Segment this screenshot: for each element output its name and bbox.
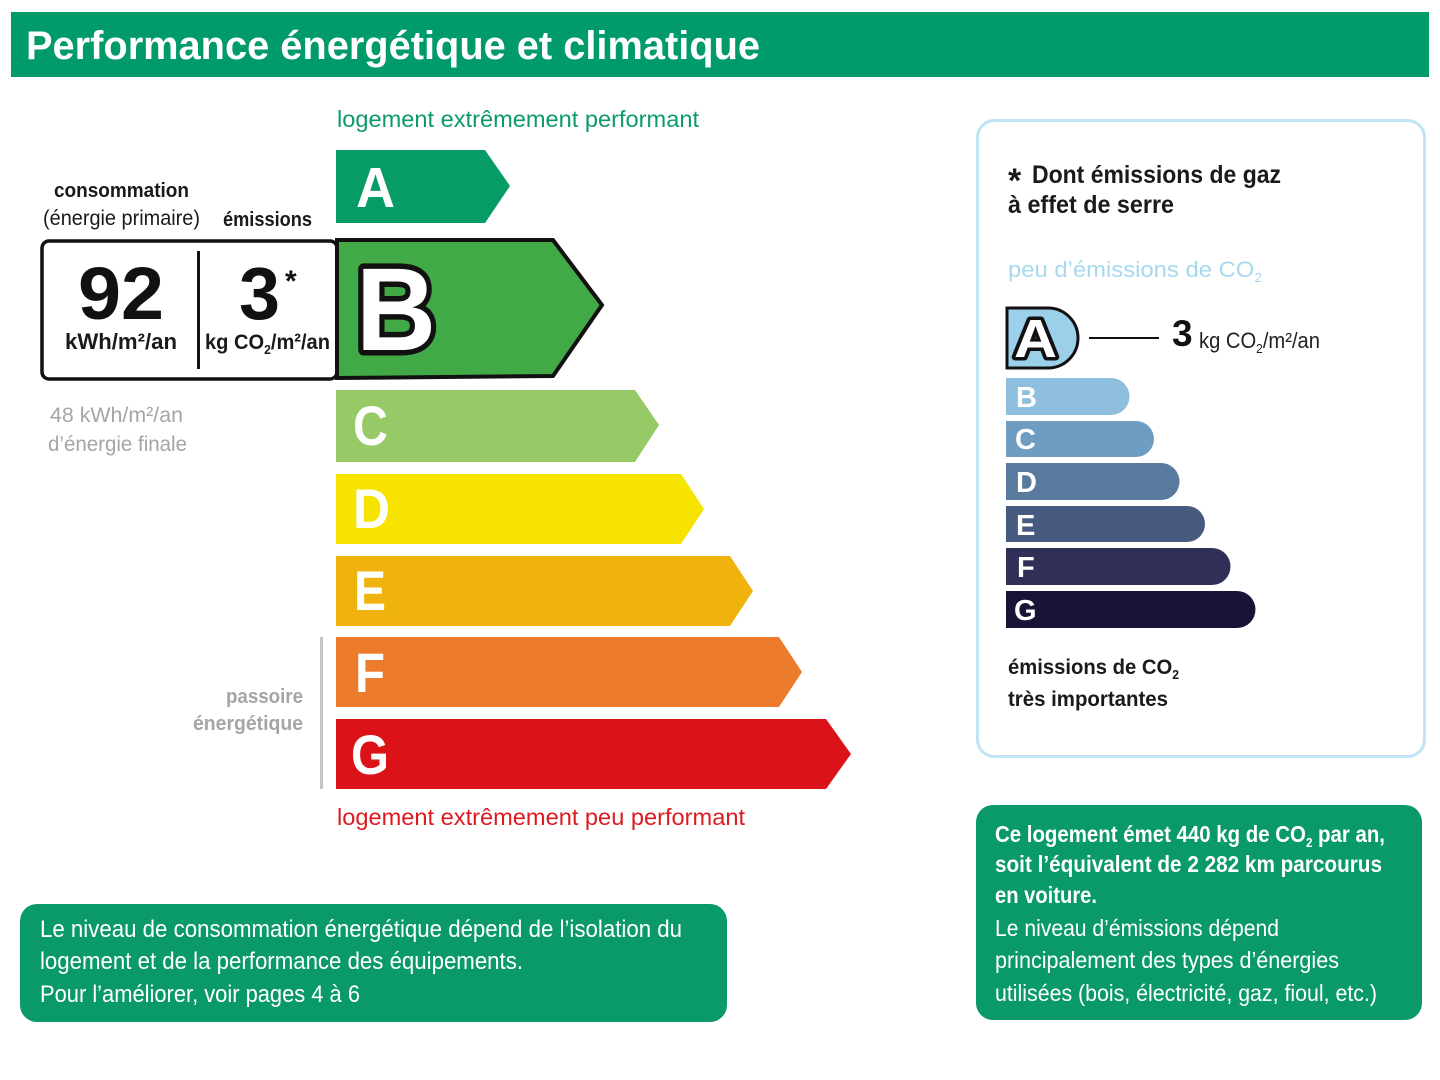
emissions value: 2	[1256, 341, 1263, 356]
bar E: E	[1016, 510, 1035, 542]
current rating box with values	[42, 241, 337, 379]
arrow E	[336, 556, 753, 626]
energy scale arrows	[336, 150, 851, 789]
high emissions label	[1008, 655, 1179, 711]
arrow F	[336, 637, 802, 707]
callout: energy consumption: Pour l’améliorer, voir pages 4 à 6	[40, 981, 360, 1008]
callout: energy consumption	[20, 904, 727, 1022]
callout: energy consumption: logement et de la performance des équipements.	[40, 948, 523, 975]
consumption column heading: (énergie primaire)	[43, 207, 200, 230]
callout: CO2 emissions: Le niveau d’émissions dépend	[995, 915, 1279, 941]
passoire énergétique label with bracket	[193, 637, 322, 789]
climate scale bars	[1006, 378, 1255, 628]
callout: CO2 emissions: par an,	[1312, 821, 1385, 847]
emissions value: 3	[1172, 313, 1193, 354]
high emissions label: très importantes	[1008, 687, 1168, 711]
emissions value: /m²/an	[1263, 328, 1320, 353]
emissions column heading: émissions	[223, 209, 312, 231]
bar G: G	[1014, 595, 1037, 627]
panel heading	[1008, 161, 1281, 219]
final energy note: 48 kWh/m²/an	[50, 403, 183, 427]
arrow E: E	[354, 559, 386, 622]
bar B	[1006, 378, 1130, 415]
arrow C: C	[353, 394, 388, 457]
unit: kWh: kWh/m²/an	[65, 329, 177, 354]
top scale label: logement extrêmement performant	[337, 106, 700, 132]
bar C	[1006, 421, 1154, 457]
callout: CO2 emissions: 2	[1306, 835, 1312, 850]
arrow C	[336, 390, 659, 462]
arrow D: D	[353, 477, 390, 540]
value: 92: 92	[78, 252, 164, 335]
arrow A: A	[356, 156, 395, 220]
final energy note	[48, 403, 187, 456]
value: 3: 3	[239, 252, 280, 335]
emissions value: kg CO	[1199, 328, 1261, 353]
bar A: current climate rating: A	[1014, 309, 1057, 369]
arrow G	[336, 719, 851, 789]
bar D	[1006, 463, 1180, 500]
consumption column heading	[43, 180, 200, 230]
low emissions label: 2	[1254, 270, 1262, 285]
emissions value	[1172, 313, 1320, 356]
bar F: F	[1017, 552, 1035, 584]
connector line	[1089, 337, 1159, 339]
unit: kg CO2: 2	[264, 342, 271, 357]
callout: CO2 emissions: utilisées (bois, électricité, gaz, fioul, etc.)	[995, 980, 1377, 1006]
arrow F: F	[355, 641, 385, 704]
low emissions label: peu d’émissions de CO	[1008, 257, 1241, 282]
callout: CO2 emissions: Ce logement émet 440 kg de CO	[995, 821, 1345, 847]
panel: greenhouse gas emissions	[978, 120, 1424, 756]
panel heading: *	[1008, 162, 1022, 200]
arrow G: G	[351, 723, 389, 786]
unit: kg CO2: /m²/an	[271, 330, 330, 354]
panel heading: Dont émissions de gaz	[1032, 161, 1281, 189]
arrow B: current rating: B	[356, 244, 436, 376]
panel heading: à effet de serre	[1008, 191, 1174, 219]
callout: CO2 emissions: soit l’équivalent de 2 282 km parcourus	[995, 851, 1382, 877]
bottom scale label: logement extrêmement peu performant	[337, 804, 746, 830]
arrow D	[336, 474, 704, 544]
asterisk: *	[285, 265, 297, 298]
arrow B: current rating	[337, 240, 602, 378]
passoire énergétique label with bracket: passoire	[226, 686, 303, 708]
bar C: C	[1015, 424, 1036, 456]
unit: kg CO2: kg CO	[205, 330, 268, 354]
bar G	[1006, 591, 1255, 628]
title: Performance énergétique et climatique	[26, 24, 760, 68]
bar B: B	[1016, 382, 1037, 414]
callout: CO2 emissions	[976, 805, 1422, 1020]
callout: CO2 emissions: en voiture.	[995, 882, 1097, 908]
callout: energy consumption: Le niveau de consommation énergétique dépend de l’isolation du	[40, 916, 682, 943]
final energy note: d’énergie finale	[48, 432, 187, 456]
passoire énergétique label with bracket: énergétique	[193, 713, 303, 735]
header banner	[11, 12, 1429, 77]
high emissions label: 2	[1172, 667, 1179, 682]
bar D: D	[1016, 467, 1037, 499]
bar E	[1006, 506, 1205, 542]
callout: CO2 emissions: principalement des types d’énergies	[995, 947, 1339, 973]
high emissions label: émissions de CO	[1008, 655, 1182, 679]
bar A: current climate rating	[1007, 308, 1078, 369]
consumption column heading: consommation	[54, 180, 189, 202]
bar F	[1006, 548, 1230, 585]
arrow A	[336, 150, 510, 223]
